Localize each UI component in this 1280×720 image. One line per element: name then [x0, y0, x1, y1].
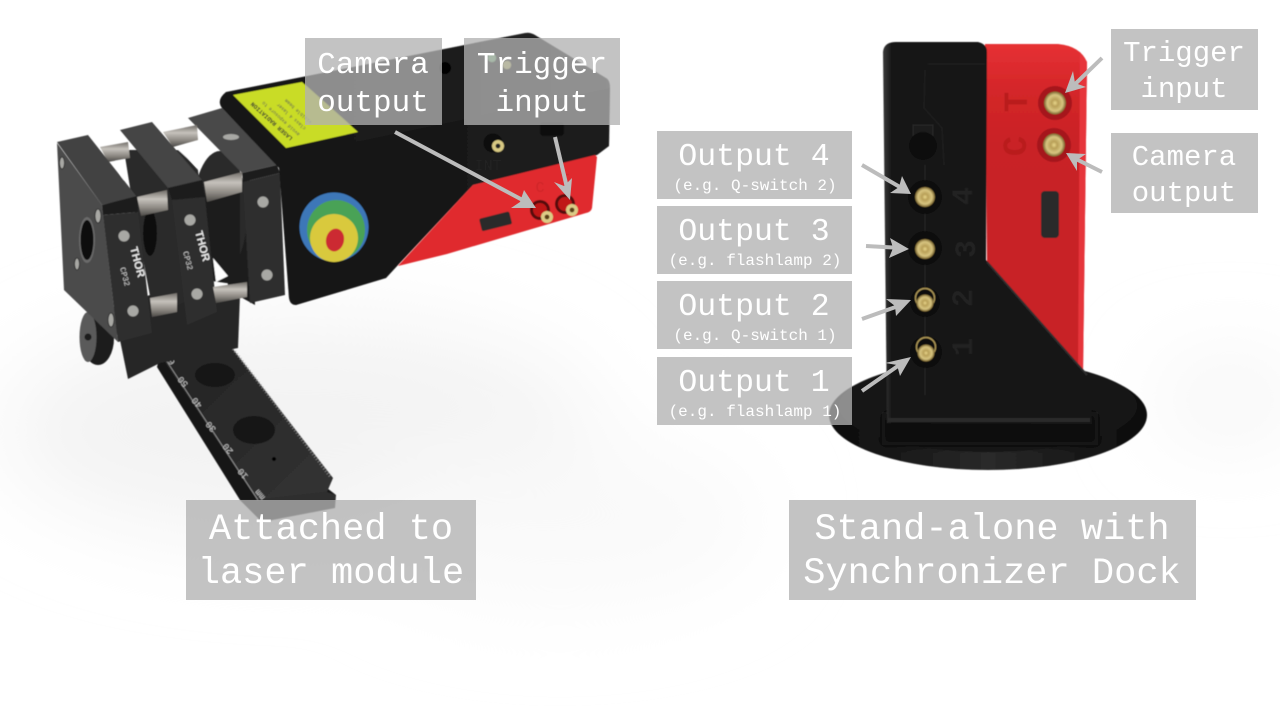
label: attached to laser module: laser module [198, 553, 464, 595]
arrow: output 1 [862, 357, 911, 391]
panel slot [1041, 191, 1059, 238]
output digits: 3 [951, 240, 985, 258]
beam profile target [300, 192, 368, 262]
dock base [829, 360, 1147, 470]
black body [883, 42, 1092, 424]
label: trigger input (right): input [1140, 73, 1228, 106]
output connectors [908, 180, 942, 368]
label: stand-alone with synchronizer dock: Synchronizer Dock [803, 553, 1181, 595]
mounting rail: 30 [204, 419, 219, 434]
front plate: THOR [127, 246, 147, 279]
lower rods [137, 172, 247, 317]
label: camera output (left): Camera [317, 48, 429, 83]
red panel letters: C [999, 136, 1037, 156]
warning label [233, 82, 358, 148]
label: output 1: Output 1 [678, 366, 830, 401]
arrow: output 3 [866, 238, 909, 258]
front plate: CP32 [117, 266, 131, 288]
upper rods [100, 125, 198, 162]
warning label: avoid exposure to [261, 100, 301, 137]
red panel letters: T [1000, 92, 1038, 112]
label: trigger input (right) [1111, 29, 1258, 110]
label: output 4 [657, 131, 852, 199]
keyhole port [909, 125, 937, 160]
rear port [540, 122, 564, 136]
warning label: class 4 laser [275, 101, 307, 131]
label: camera output (right): Camera [1132, 141, 1236, 174]
trigger and camera connectors [1037, 86, 1072, 162]
module black body [220, 33, 610, 305]
label: camera output (right): output [1132, 177, 1236, 210]
red edge highlight [1078, 52, 1087, 372]
label: output 2: Output 2 [678, 290, 830, 325]
slot in red panel [479, 211, 512, 231]
output digits: 1 [948, 338, 982, 356]
embossed marks: C [535, 180, 545, 197]
label: output 3 [657, 206, 852, 274]
middle plate: CP32 [180, 250, 194, 272]
arrow: output 4 [862, 165, 911, 194]
mounting rail: 50 [176, 374, 191, 389]
background soft shadows [0, 320, 1280, 600]
inner lens barrels [115, 142, 255, 305]
label: trigger input (right): Trigger [1123, 37, 1245, 70]
label: output 4: Output 4 [678, 140, 830, 175]
warning label: LASER RADIATION [249, 100, 294, 142]
label: stand-alone with synchronizer dock [789, 500, 1196, 600]
front plate [57, 135, 152, 342]
synchronizer dock device illustration [829, 42, 1147, 470]
label: output 3: Output 3 [678, 215, 830, 250]
arrow: camera output right [1066, 153, 1102, 172]
label: camera output (left): output [317, 86, 429, 121]
arrow: trigger input left [554, 137, 572, 200]
arrow: output 2 [862, 299, 911, 319]
red side panel [398, 155, 597, 266]
mounting rail: 10 [236, 466, 251, 481]
mounting rail [157, 335, 336, 522]
mounting rail: 60 [163, 352, 178, 367]
output digits [948, 187, 985, 356]
output digits: 4 [948, 187, 982, 205]
label: attached to laser module [186, 500, 476, 600]
label: output 1 [657, 357, 852, 425]
laser module device illustration [57, 33, 610, 522]
label: output 2 [657, 281, 852, 349]
label: attached to laser module: Attached to [209, 509, 453, 551]
embossed marks [474, 158, 570, 197]
top connector [484, 134, 504, 152]
mounting block and knob [80, 295, 240, 379]
mounting rail: 20 [221, 441, 236, 456]
label: trigger input (left) [464, 38, 620, 125]
label: output 4: (e.g. Q-switch 2) [673, 177, 837, 195]
dock shadow under body [882, 412, 1098, 445]
red panel letters [999, 92, 1038, 156]
middle plate: THOR [192, 230, 212, 263]
label: camera output (right) [1111, 133, 1258, 213]
embossed marks: INT [474, 158, 502, 175]
arrow: camera output left [395, 132, 536, 208]
warning label: visible beam [284, 97, 313, 125]
red body [985, 44, 1087, 374]
label: output 1: (e.g. flashlamp 1) [669, 403, 841, 421]
arrow: trigger input right [1065, 58, 1102, 93]
label: output 3: (e.g. flashlamp 2) [669, 252, 841, 270]
label: stand-alone with synchronizer dock: Stand-alone with [814, 509, 1170, 551]
output digits: 2 [948, 289, 982, 307]
label: trigger input (left): Trigger [477, 48, 607, 83]
mounting rail: mm [253, 487, 268, 502]
label: output 2: (e.g. Q-switch 1) [673, 327, 837, 345]
label: camera output (left) [305, 38, 442, 125]
red connectors [530, 194, 578, 223]
rear mount plate [188, 108, 285, 303]
mounting rail: 40 [190, 395, 205, 410]
middle plate [120, 122, 217, 325]
embossed marks: T [560, 172, 570, 189]
label: trigger input (left): input [495, 86, 589, 121]
